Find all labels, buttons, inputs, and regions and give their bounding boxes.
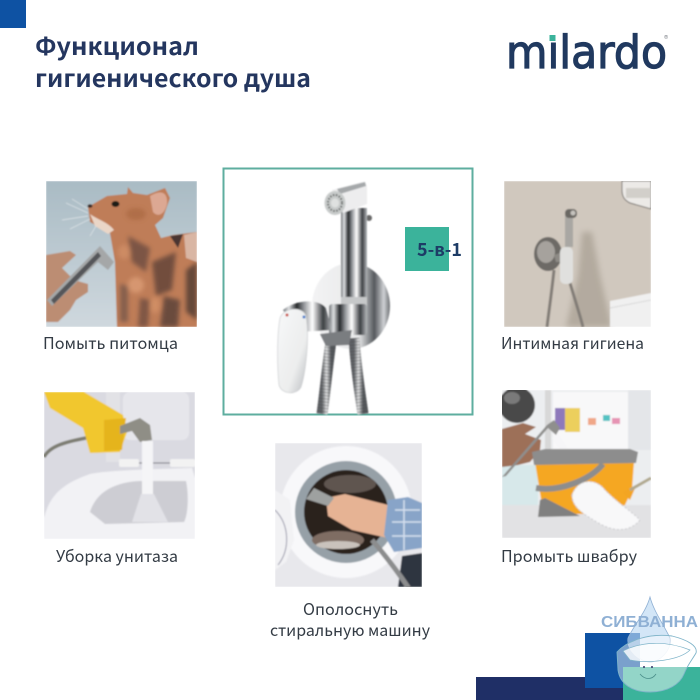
icon: hygienic shower set — [278, 182, 390, 414]
label: wash pet: Помыть питомца — [43, 330, 178, 354]
label: rinse washing machine: стиральную машину — [270, 617, 431, 641]
photo: rinsing washing machine — [275, 443, 422, 590]
title — [35, 27, 311, 94]
label: intimate hygiene: Интимная гигиена — [501, 330, 644, 354]
title: Функционал — [35, 27, 199, 62]
photo: intimate hygiene wall set — [504, 181, 651, 327]
title: гигиенического душа — [35, 59, 311, 94]
badge: 5-в-1 — [405, 227, 462, 271]
photo: rinsing a mop — [499, 387, 651, 538]
label: rinse washing machine — [270, 596, 431, 641]
badge: 5-в-1: 5-в-1 — [417, 236, 462, 262]
panel: product frame — [224, 168, 472, 414]
photo: washing a cat — [46, 181, 197, 327]
decorative blocks bottom right — [476, 633, 700, 700]
label: rinse washing machine: Ополоснуть — [303, 596, 398, 620]
photo: toilet cleaning — [44, 392, 195, 539]
label: rinse mop: Промыть швабру — [501, 543, 638, 567]
watermark: СИБВАННА — [601, 597, 698, 692]
decorative corner square — [0, 0, 26, 28]
logo: milardo: ® — [664, 32, 668, 45]
watermark: СИБВАННА: СИБВАННА — [601, 614, 698, 631]
label: toilet cleaning: Уборка унитаза — [56, 543, 178, 567]
logo: milardo: milardo — [506, 26, 667, 79]
